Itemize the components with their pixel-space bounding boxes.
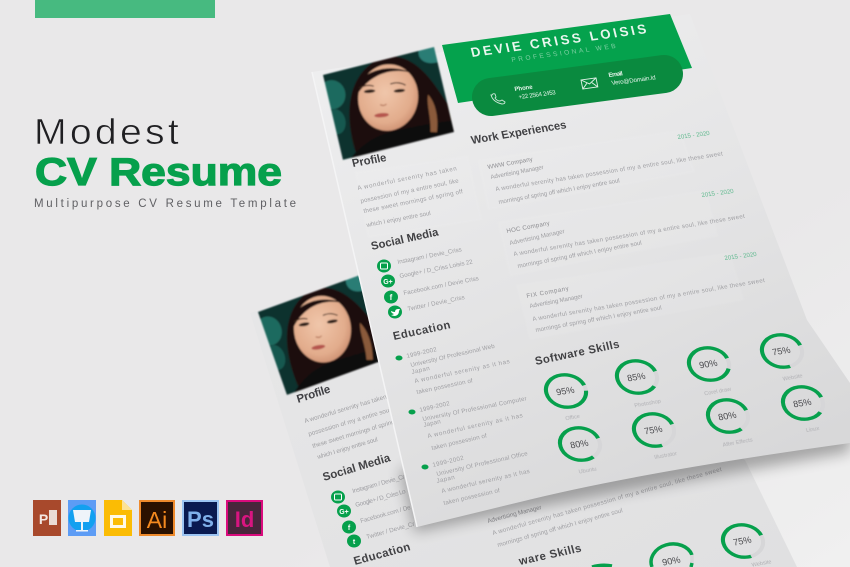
education entry 1: University Of Professional Web xyxy=(410,343,496,369)
back sheet software skills: 75% xyxy=(732,535,752,548)
back sheet social media: Social Media xyxy=(321,452,392,484)
skill: After Effects 80%: After Effects xyxy=(722,437,754,449)
education section: Education xyxy=(392,319,452,343)
work entry 1: A wonderful serenity has taken possession of my a entire soul, like these sweet xyxy=(495,150,724,193)
social media section: Twitter / Devie_Criss xyxy=(407,294,465,313)
work experiences section: Work Experiences xyxy=(470,119,568,147)
skill: Office 95%: 95% xyxy=(555,385,575,397)
work entry 1: 2015 - 2020 xyxy=(677,130,711,141)
education entry 3: taken possession of xyxy=(443,487,501,507)
education entry 3: Japan xyxy=(436,474,456,485)
icon: instagram xyxy=(377,260,391,272)
skill: Office 95% xyxy=(542,372,590,422)
profile photo xyxy=(322,46,455,161)
skill: Website 75%: Website xyxy=(782,373,803,383)
front sheet shadow xyxy=(400,400,850,532)
skill: Illustrator 75%: 75% xyxy=(643,424,663,436)
skill: Illustrator 75% xyxy=(630,411,678,461)
work experiences section xyxy=(470,119,766,334)
back sheet social media: G+ xyxy=(339,509,349,516)
work entry 2: Advertising Manager xyxy=(509,228,565,247)
top green bar xyxy=(35,0,215,18)
back sheet social media: Instagram / Devie_Cr xyxy=(352,474,406,495)
icon: twitter xyxy=(388,306,402,318)
skill: Linux 85%: 85% xyxy=(792,397,812,409)
back sheet social media xyxy=(321,452,416,548)
title block xyxy=(34,111,296,210)
back sheet profile: which I enjoy entire soul xyxy=(316,436,379,461)
education entry 2: University Of Professional Computer xyxy=(422,395,527,423)
work entry 2 xyxy=(506,188,746,270)
education entry 2: taken possession of xyxy=(431,432,488,452)
icon: PowerPoint: P xyxy=(39,511,48,527)
work entry 2: A wonderful serenity has taken possession of my a entire soul, like these sweet xyxy=(513,213,746,258)
profile section: these sweet mornings of spring off xyxy=(363,188,464,215)
front resume sheet xyxy=(312,14,850,527)
education entry 3 xyxy=(422,450,530,507)
work entry 1: mornings of spring off which I enjoy entire soul xyxy=(498,177,620,206)
social media section: Instagram / Devie_Criss xyxy=(397,246,462,266)
icon: Google Slides xyxy=(104,500,132,536)
phone details: +22 2564 2453 xyxy=(518,89,557,101)
phone details xyxy=(514,84,557,101)
back sheet social media: Twitter / Devie_Cr xyxy=(366,521,416,541)
education entry 2: Japan xyxy=(423,418,442,429)
education section xyxy=(392,319,530,507)
skill: Corel draw 90%: 90% xyxy=(698,358,718,370)
work entry 2: mornings of spring off which I enjoy entire soul xyxy=(517,240,642,270)
education entry 1: Japan xyxy=(411,365,431,376)
education entry 1: taken possession of xyxy=(416,377,474,396)
skill: Corel draw 90%: Corel draw xyxy=(704,387,733,397)
skill: Website 75%: 75% xyxy=(771,345,791,357)
social media section: Facebook.com / Devie Criss xyxy=(403,275,479,297)
profile section: which I enjoy entire soul xyxy=(365,210,431,229)
title: CV Resume: CV Resume xyxy=(35,151,282,194)
education entry 2: 1999-2002 xyxy=(419,400,451,414)
email details: Vero@Domain.Id xyxy=(611,74,656,87)
education entry 3: University Of Professional Office xyxy=(436,450,529,478)
education entry 1 xyxy=(396,343,510,396)
icon: InDesign xyxy=(227,501,262,535)
skill: After Effects 80% xyxy=(704,397,754,449)
work entry 1 xyxy=(487,130,724,206)
work entry 3: Advertising Manager xyxy=(529,293,583,310)
icon: Illustrator: Ai xyxy=(147,507,167,533)
skill: Photoshop 85%: 85% xyxy=(626,371,646,383)
back sheet profile: these sweet mornings of spring xyxy=(312,418,396,450)
work entry 1: WWW Company xyxy=(487,156,534,171)
education entry 1: 1999-2002 xyxy=(406,346,438,360)
phone details: Phone xyxy=(514,84,534,93)
profile section: Profile xyxy=(351,152,388,170)
education entry 3: A wonderful serenity as it has xyxy=(441,468,530,495)
skill: Ubuntu 80% xyxy=(556,425,604,476)
icon: PowerPoint xyxy=(33,500,61,536)
back sheet photo xyxy=(257,274,378,396)
back sheet profile xyxy=(295,383,396,461)
skill: Ubuntu 80%: 80% xyxy=(569,438,589,450)
back sheet profile: Profile xyxy=(295,383,332,406)
back sheet software skills xyxy=(517,522,772,567)
back sheet social media: Facebook.com / De xyxy=(360,504,412,525)
skill: Office 95%: Office xyxy=(565,414,581,422)
icon: Photoshop: Ps xyxy=(187,507,214,532)
back sheet profile: A wonderful serenity has taken xyxy=(304,393,388,425)
back sheet work lines: Advertising Manager xyxy=(487,504,543,525)
front sheet paper xyxy=(312,14,850,527)
content cards xyxy=(355,130,744,340)
back sheet work lines: mornings of spring off which I enjoy entire soul xyxy=(497,507,624,549)
back sheet social media: t xyxy=(353,539,356,546)
work entry 3: 2015 - 2020 xyxy=(724,251,758,262)
software icons row xyxy=(33,500,262,536)
work entry 1: Advertising Manager xyxy=(490,164,544,181)
header contact pill xyxy=(491,74,664,97)
back resume sheet xyxy=(247,262,797,567)
work entry 3: mornings of spring off which I enjoy entire soul xyxy=(535,304,662,334)
subtitle: Multipurpose CV Resume Template xyxy=(34,198,296,210)
profile section xyxy=(351,152,464,229)
header green banner xyxy=(442,14,692,103)
back sheet social media: Google+ / D_Criss Lo xyxy=(355,488,407,509)
email details: Email xyxy=(608,70,624,79)
icon: Keynote xyxy=(68,500,96,536)
social media section: Social Media xyxy=(370,226,440,253)
skill: Ubuntu 80%: Ubuntu xyxy=(578,466,597,476)
skill: After Effects 80%: 80% xyxy=(717,410,737,422)
back sheet social media: f xyxy=(348,525,351,532)
profile section: possession of my a entire soul, like xyxy=(360,177,460,205)
social media section: Google+ / D_Criss Loisis 22 xyxy=(399,258,474,280)
education entry 2: A wonderful serenity as it has xyxy=(427,412,523,440)
back sheet work lines: A wonderful serenity has taken possession of my a entire soul, like these sweet xyxy=(492,466,723,537)
back sheet paper xyxy=(250,262,797,567)
education entry 3: 1999-2002 xyxy=(432,455,465,469)
skill: Website 75% xyxy=(758,332,806,383)
software skills section xyxy=(534,332,827,476)
icon: google plus: G+ xyxy=(383,279,393,286)
work entry 3: A wonderful serenity has taken possession of my a entire soul, like these sweet xyxy=(532,277,766,323)
skill: Corel draw 90% xyxy=(685,345,733,397)
education entry 2 xyxy=(408,395,527,452)
work entry 3: FIX Company xyxy=(526,285,570,300)
icon: facebook: f xyxy=(390,293,393,302)
work entry 2: HOC Company xyxy=(506,220,551,235)
front sheet left edge highlight xyxy=(312,72,417,527)
icon: envelope xyxy=(581,78,598,89)
icon: Illustrator xyxy=(140,501,174,535)
title: Modest: Modest xyxy=(34,111,182,152)
icon: Photoshop xyxy=(183,501,218,535)
icon: InDesign: Id xyxy=(235,507,254,532)
profile section: A wonderful serenity has taken xyxy=(357,165,458,192)
social media section xyxy=(370,226,479,318)
icon: phone xyxy=(491,94,505,104)
skill: Illustrator 75%: Illustrator xyxy=(654,451,678,461)
skill: Linux 85%: Linux xyxy=(805,426,820,434)
education entry 1: A wonderful serenity as it has xyxy=(414,358,510,385)
back sheet profile: possession of my a entire soul xyxy=(308,407,392,438)
skill: Photoshop 85% xyxy=(613,358,662,409)
software skills section: Software Skills xyxy=(534,339,621,368)
work entry 2: 2015 - 2020 xyxy=(701,188,735,199)
work entry 3 xyxy=(526,251,766,334)
job title: PROFESSIONAL WEB xyxy=(511,43,617,64)
skill: Photoshop 85%: Photoshop xyxy=(634,399,662,409)
name: DEVIE CRISS LOISIS xyxy=(469,21,648,60)
skill: Linux 85% xyxy=(779,384,827,434)
